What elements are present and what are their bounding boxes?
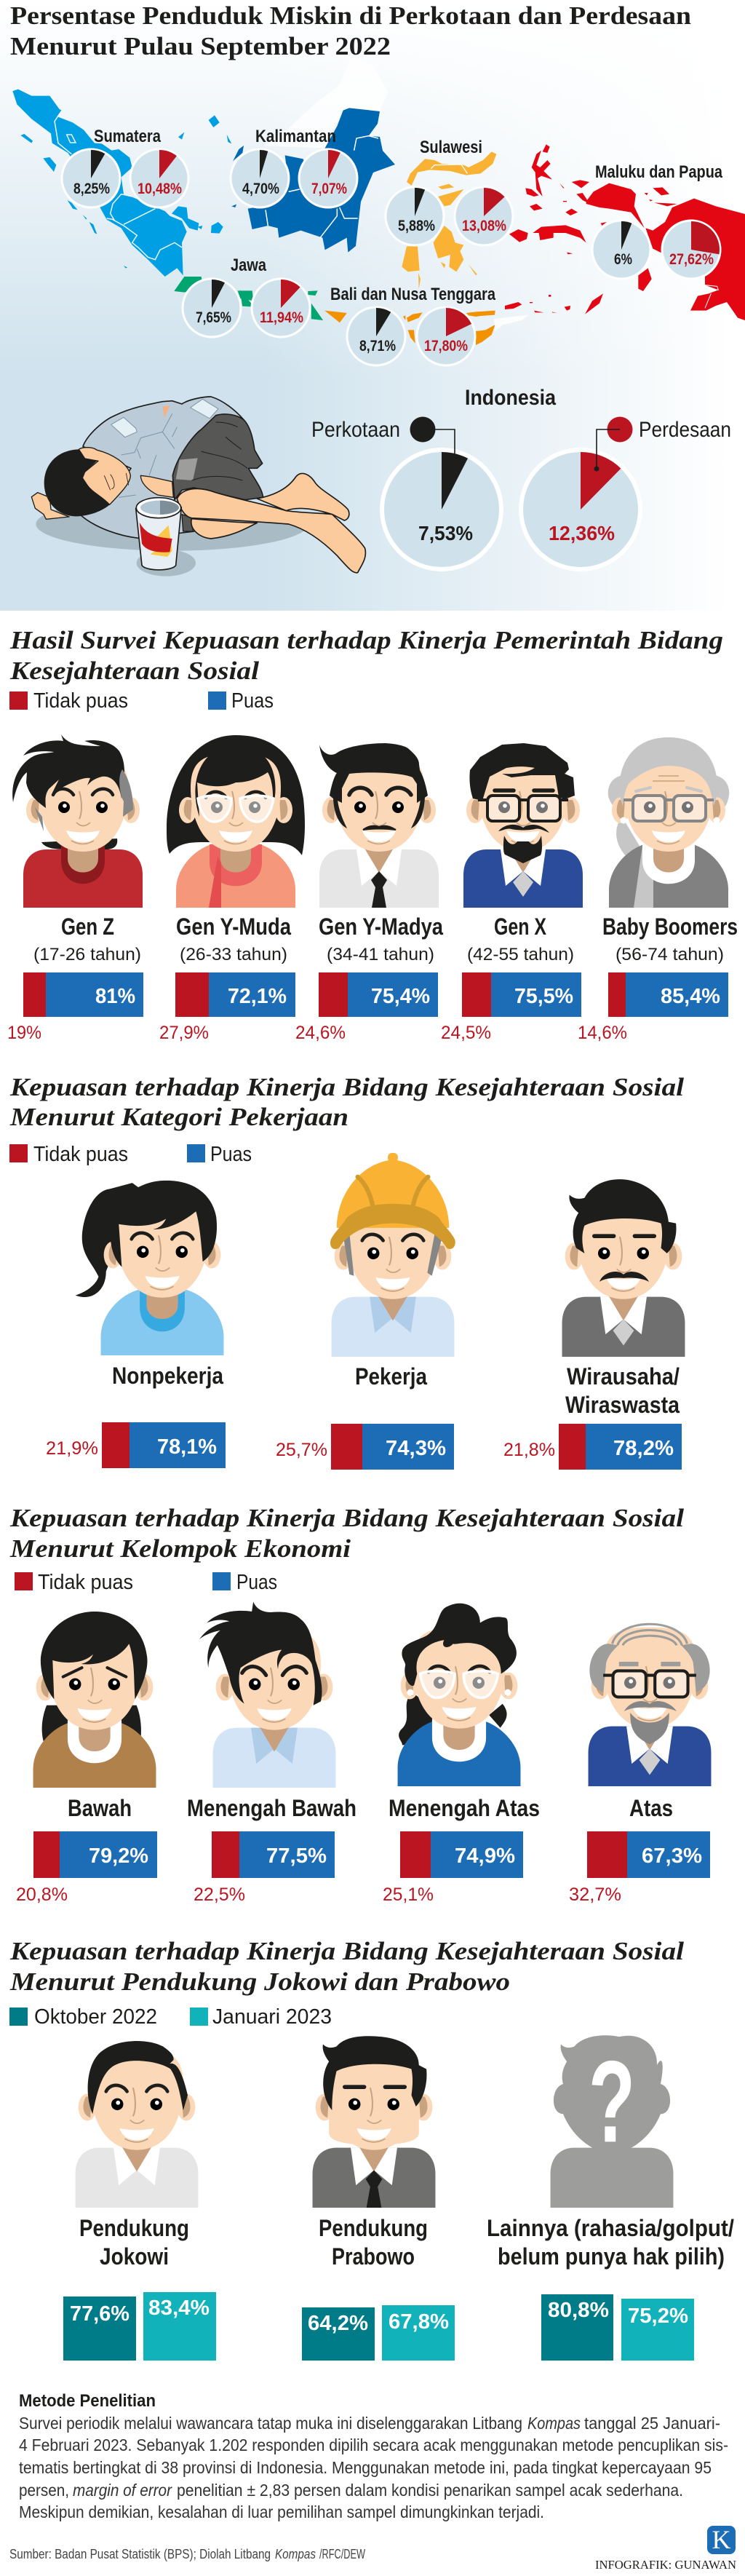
map of Indonesia [12,56,745,345]
legend: survey period: Januari 2023 [212,2005,332,2029]
bars: economic group: 20,8% [16,1885,68,1905]
methodology note [19,2391,728,2521]
heading: by economic group: Kepuasan terhadap Kinerja Bidang Kesejahteraan Sosial [9,1504,684,1532]
methodology note: Metode Penelitian [19,2391,156,2411]
figure: Pekerja [330,1153,455,1357]
figure: Bawah [33,1612,156,1788]
Indonesia national comparison: Perkotaan [311,418,400,442]
bars: occupation: 21,8% [503,1440,555,1460]
names: generations: Gen X [494,914,547,940]
bars: generations: 72,1% [228,985,287,1008]
bars: generations [7,972,728,1043]
bars: economic group: 32,7% [569,1885,621,1905]
names: generations: (56-74 tahun) [615,945,724,964]
bars: generations: 14,6% [578,1023,627,1043]
names: economic group [68,1795,673,1821]
bars: supporters: 64,2% [308,2312,368,2335]
logo: Kompas K: K [712,2525,730,2554]
bars: economic group: 77,5% [266,1844,327,1868]
methodology note: penelitian ± 2,83 persen dalam kondisi penarikan sampel acak sederhana. [177,2481,683,2500]
bars: supporters: 80,8% [548,2299,609,2322]
names: supporters: Prabowo [332,2243,415,2270]
label and pies: Jawa: 7,65% [196,309,231,326]
legend: economic group: Puas [236,1571,277,1594]
figure: Wirausaha/Wiraswasta [562,1179,685,1357]
heading: by occupation [9,1073,684,1131]
names: supporters [79,2215,734,2270]
Indonesia national comparison [311,386,731,569]
label and pies: Sulawesi: Sulawesi [420,138,482,157]
bars: economic group: 22,5% [194,1885,245,1905]
figure: Baby Boomers [608,737,729,908]
label and pies: Sulawesi: 13,08% [462,218,506,234]
label and pies: Sumatera: 8,25% [73,181,110,197]
names: generations: Gen Z [61,914,114,940]
bars: economic group: 74,9% [455,1844,515,1868]
names: occupation: Nonpekerja [112,1363,223,1389]
title: poverty map: Persentase Penduduk Miskin di Perkotaan dan Perdesaan [10,1,691,30]
methodology note: Survei periodik melalui wawancara tatap muka ini diselenggarakan Litbang [19,2414,522,2433]
map background panel [0,0,745,611]
names: occupation: Wiraswasta [565,1392,680,1418]
label and pies: Bali dan Nusa Tenggara: 17,80% [424,338,468,354]
bars: occupation: 78,1% [157,1435,217,1459]
names: economic group: Menengah Bawah [187,1795,356,1821]
bars: supporters: 77,6% [70,2302,130,2326]
source line: /RFC/DEW [319,2547,365,2561]
methodology note: Meskipun demikian, kesalahan di luar pemilihan sampel dimungkinkan terjadi. [19,2502,544,2521]
bars: economic group: 79,2% [89,1844,148,1868]
figure: Gen Y-Muda [167,735,305,908]
figure: Lainnya silhouette with question mark: ? [589,2037,635,2167]
bars: generations: 75,4% [371,985,430,1008]
legend: survey period: Oktober 2022 [34,2005,157,2029]
names: occupation [112,1363,680,1418]
label and pies: Jawa: Jawa [231,255,267,275]
bars: generations: 19% [7,1023,41,1043]
legend: economic group: Tidak puas [38,1571,133,1594]
figure: Lainnya silhouette with question mark [551,2035,673,2208]
names: generations [33,914,738,964]
label and pies: Kalimantan: Kalimantan [255,127,336,146]
heading: by occupation: Kepuasan terhadap Kinerja Bidang Kesejahteraan Sosial [9,1073,684,1101]
bars: generations: 85,4% [661,985,720,1008]
bars: generations: 24,5% [441,1023,491,1043]
bars: supporters: 83,4% [148,2296,210,2320]
heading: survey by generation: Kesejahteraan Sosial [9,657,259,685]
label and pies: Kalimantan: 4,70% [242,181,279,197]
illustration: poor man curled on floor with glass [31,397,365,576]
names: economic group: Atas [629,1795,673,1821]
heading: survey by generation [9,626,723,685]
figure: Atas [589,1624,711,1786]
title: poverty map [10,1,691,60]
methodology note: tanggal 25 Januari- [584,2414,720,2433]
names: occupation: Wirausaha/ [567,1363,680,1390]
bars: economic group: 67,3% [642,1844,702,1868]
names: occupation: Pekerja [355,1363,427,1390]
figure: Menengah Bawah [199,1602,335,1788]
label and pies: Bali dan Nusa Tenggara: Bali dan Nusa Tenggara [330,285,496,304]
names: generations: Gen Y-Madya [319,914,443,940]
bars: economic group [16,1831,710,1905]
names: economic group: Bawah [68,1795,132,1821]
label and pies: Bali dan Nusa Tenggara: 8,71% [359,338,396,354]
label and pies: Sumatera [62,127,188,207]
label and pies: Sulawesi: 5,88% [398,218,435,234]
legend: survey period [9,2005,332,2029]
methodology note: Kompas [527,2414,581,2433]
legend: occupation: Tidak puas [33,1143,128,1166]
figure: Pendukung Jokowi [76,2041,198,2208]
heading: by supporters: Menurut Pendukung Jokowi dan Prabowo [9,1967,510,1996]
figure: Nonpekerja [76,1181,223,1355]
label and pies: Kalimantan: 7,07% [311,181,347,197]
label and pies: Sulawesi [386,138,513,245]
Indonesia national comparison: Perdesaan [639,418,731,442]
legend: occupation: Puas [210,1143,252,1166]
legend: generation: Tidak puas [33,689,128,713]
heading: by economic group [9,1504,684,1563]
figure: Pendukung Prabowo [313,2036,435,2208]
bars: occupation: 25,7% [276,1440,327,1460]
label and pies: Maluku dan Papua: 6% [614,251,632,268]
names: generations: (17-26 tahun) [33,945,141,964]
title: poverty map: Menurut Pulau September 2022 [10,32,391,60]
legend: economic group [15,1571,277,1594]
names: generations: (42-55 tahun) [467,945,574,964]
figure: Gen X [463,743,583,908]
Indonesia national comparison: 7,53% [418,522,473,544]
label and pies: Kalimantan [231,127,357,207]
names: supporters: Jokowi [100,2243,169,2270]
bars: occupation [46,1422,682,1470]
names: supporters: Pendukung [79,2215,189,2241]
label and pies: Maluku dan Papua: 27,62% [669,251,714,268]
bars: occupation: 78,2% [613,1437,674,1460]
label and pies: Maluku dan Papua [592,162,723,279]
figure: Gen Y-Madya [319,743,439,908]
legend: generation: Puas [231,689,274,713]
label and pies: Sumatera: Sumatera [94,127,162,146]
bars: economic group: 25,1% [383,1885,434,1905]
legend: generation [9,689,274,713]
bars: generations: 81% [95,985,135,1008]
heading: by occupation: Menurut Kategori Pekerjaan [9,1103,348,1131]
label and pies: Jawa: 11,94% [260,309,303,326]
methodology note: margin of error [73,2481,172,2500]
bars: supporters: 67,8% [389,2310,449,2334]
names: supporters: belum punya hak pilih) [498,2243,725,2270]
label and pies: Maluku dan Papua: Maluku dan Papua [595,162,723,182]
bars: occupation: 21,9% [46,1438,98,1459]
heading: survey by generation: Hasil Survei Kepuasan terhadap Kinerja Pemerintah Bidang [9,626,723,654]
source line: Kompas [275,2547,316,2561]
bars: generations: 24,6% [295,1023,346,1043]
bars: supporters: 75,2% [628,2304,688,2328]
heading: by supporters [9,1937,684,1996]
figure: Gen Z [12,734,143,908]
Indonesia national comparison: 12,36% [549,522,615,544]
bars: supporters [63,2292,694,2361]
legend: occupation [9,1143,252,1166]
figure: Menengah Atas [398,1604,520,1786]
names: economic group: Menengah Atas [389,1795,540,1821]
bars: occupation: 74,3% [386,1437,446,1460]
label and pies: Jawa [183,255,310,337]
heading: by supporters: Kepuasan terhadap Kinerja Bidang Kesejahteraan Sosial [9,1937,684,1965]
names: generations: Gen Y-Muda [176,914,291,940]
Indonesia national comparison: Indonesia [465,386,556,410]
label and pies: Bali dan Nusa Tenggara [330,285,496,365]
bars: generations: 27,9% [159,1023,209,1043]
heading: by economic group: Menurut Kelompok Ekonomi [9,1534,351,1563]
credit: INFOGRAFIK: GUNAWAN [595,2558,736,2572]
names: supporters: Pendukung [319,2215,428,2241]
methodology note: persen, [19,2481,69,2500]
logo: Kompas K [707,2525,736,2554]
names: generations: (34-41 tahun) [327,945,434,964]
names: generations: (26-33 tahun) [180,945,287,964]
bars: generations: 75,5% [514,985,573,1008]
label and pies: Sumatera: 10,48% [138,181,182,197]
source line: Sumber: Badan Pusat Statistik (BPS); Diolah Litbang [9,2547,271,2561]
